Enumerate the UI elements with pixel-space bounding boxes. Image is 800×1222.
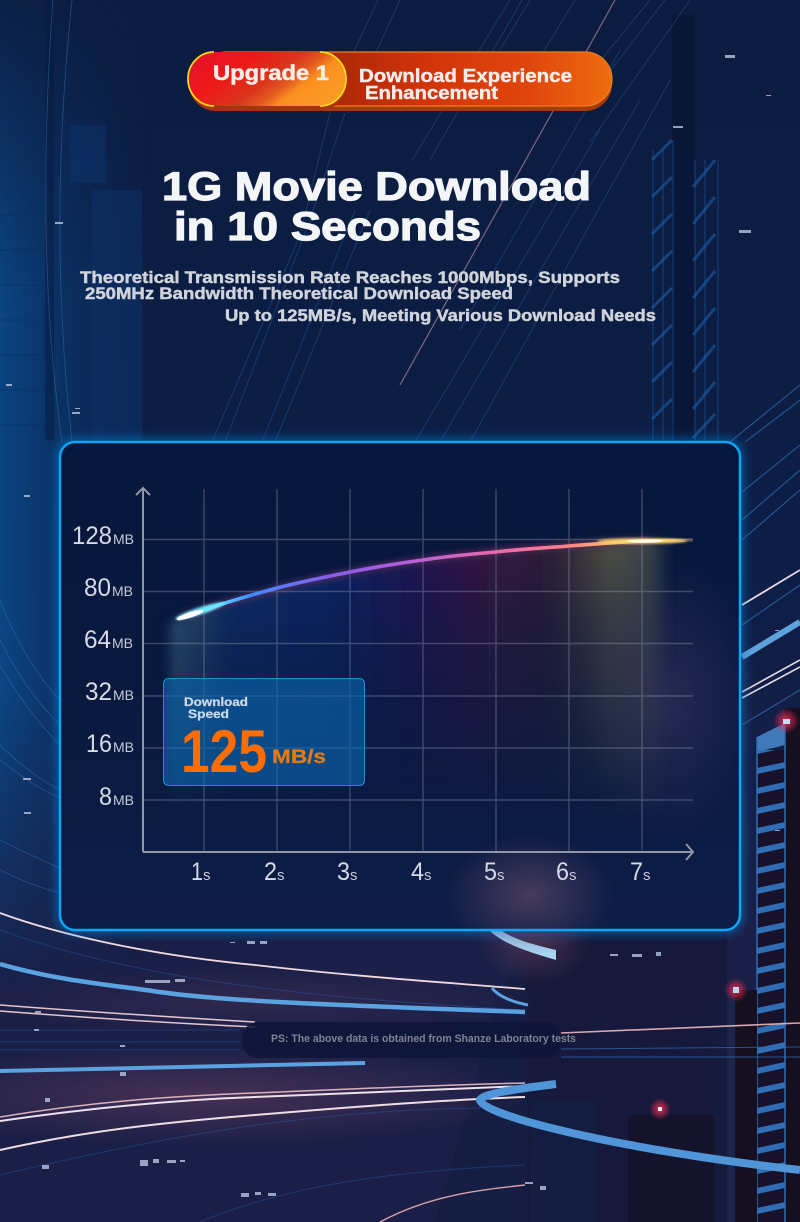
diagonal light lines top	[212, 0, 800, 725]
y-axis labels: 16	[86, 730, 112, 758]
y-axis labels: 32	[85, 678, 112, 706]
y-axis labels: MB	[112, 635, 133, 651]
badge pill: upgrade 1: Upgrade 1	[213, 62, 329, 85]
panel glow	[60, 442, 740, 930]
wash under curve	[166, 536, 668, 774]
y-axis labels: 8	[99, 783, 112, 811]
y-axis labels: 80	[84, 574, 111, 602]
footnote pill: PS: The above data is obtained from Shanze Laboratory tests	[271, 1033, 576, 1045]
header badge	[188, 52, 612, 111]
callout: download speed: 125	[181, 718, 267, 785]
x-axis labels: 3	[337, 858, 350, 886]
right lower towers	[435, 708, 800, 1222]
x-axis labels: 7	[630, 858, 643, 886]
y-axis labels: MB	[113, 687, 134, 703]
x-axis labels: s	[350, 867, 358, 884]
left buildings	[0, 0, 142, 440]
speed curve	[174, 538, 693, 622]
y-axis labels: MB	[113, 739, 134, 755]
subtitle text block: Up to 125MB/s, Meeting Various Download Needs	[225, 307, 656, 325]
x-axis labels: 2	[264, 858, 277, 886]
grid	[143, 489, 693, 852]
x-axis labels: s	[203, 867, 210, 884]
x-axis labels: 5	[484, 858, 497, 886]
x-axis labels	[191, 858, 650, 886]
subtitle text block: 250MHz Bandwidth Theoretical Download Speed	[85, 285, 513, 303]
red tower lights	[649, 708, 799, 1120]
title	[162, 165, 591, 249]
bottom light trails	[0, 913, 800, 1222]
callout: download speed: Download	[184, 697, 248, 709]
x-axis labels: s	[643, 867, 650, 884]
pink haze	[0, 1045, 530, 1145]
x-axis labels: 6	[556, 858, 569, 886]
x-axis labels: s	[277, 867, 284, 884]
badge bar: download experience	[200, 52, 612, 111]
callout: download speed	[164, 678, 364, 786]
title: in 10 Seconds	[174, 205, 481, 249]
subtitle text block	[80, 269, 656, 325]
footnote pill	[242, 1022, 576, 1058]
y-axis labels: MB	[113, 531, 134, 547]
panel body	[60, 442, 740, 930]
title: 1G Movie Download	[162, 165, 591, 209]
right lattice tower top	[652, 15, 718, 442]
y-axis labels	[72, 522, 134, 811]
callout: download speed: Speed	[188, 709, 229, 721]
badge bar: download experience: Download Experience	[359, 66, 572, 86]
x-axis labels: s	[424, 867, 432, 884]
left curved lines	[0, 0, 72, 893]
callout: download speed: MB/s	[272, 747, 326, 768]
y-axis labels: MB	[112, 583, 133, 599]
y-axis labels: 128	[72, 522, 112, 550]
subtitle text block: Theoretical Transmission Rate Reaches 1000Mbps, Supports	[80, 269, 620, 287]
y-axis labels: MB	[113, 792, 134, 808]
x-axis labels: s	[569, 867, 576, 884]
x-axis labels: 1	[191, 858, 203, 886]
axes	[136, 488, 693, 860]
badge bar: download experience: Enhancement	[365, 83, 498, 103]
x-axis labels: s	[497, 867, 504, 884]
badge pill: upgrade 1	[188, 52, 346, 111]
x-axis labels: 4	[411, 858, 424, 886]
left blue glow column	[0, 10, 116, 954]
y-axis labels: 64	[84, 626, 111, 654]
panel border	[60, 442, 740, 930]
chart panel	[60, 442, 760, 955]
